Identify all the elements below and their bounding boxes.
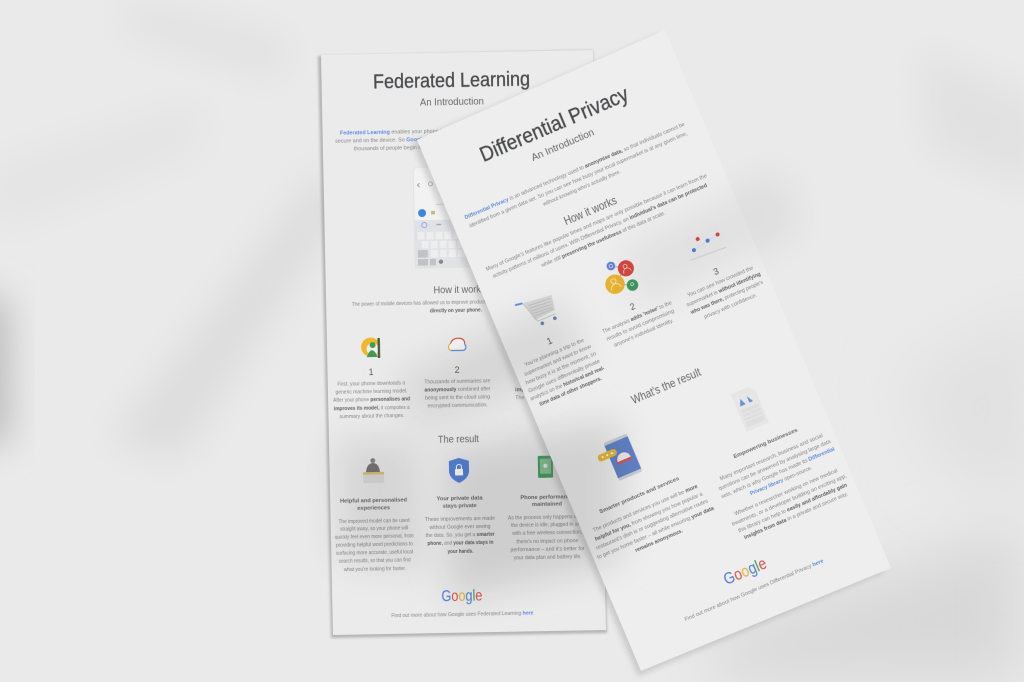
result 1: straight away, so your phone will [340, 525, 408, 533]
icon: shopping cart [516, 291, 561, 332]
step 3: supermarket is without identifying [686, 272, 762, 309]
shadow of front sheet over back sheet [412, 34, 884, 676]
step 3: 3 [712, 266, 720, 277]
heading: How it works: How it works [433, 284, 486, 296]
step 3 partial text: imp [515, 387, 525, 394]
result: smarter products: remains anonymous. [635, 528, 684, 554]
heading: The result: The result [438, 434, 479, 446]
step 2: results to avoid compromising [606, 309, 675, 343]
result: smarter products: restaurant's dish is or suggesting alternative routes [595, 498, 710, 552]
result: empowering businesses: treatments, or a developer building an exciting app, [731, 473, 848, 528]
step 1 [333, 366, 410, 420]
result 2: stays private [443, 503, 477, 510]
result 2: without Google ever seeing [429, 524, 491, 531]
result 2: phone, and your data stays in [427, 540, 493, 547]
icon: phone with food delivery [593, 433, 642, 485]
result 2 [424, 495, 496, 555]
step 1: After your phone personalises and [333, 396, 410, 404]
icon: phone with keyboard [413, 166, 493, 268]
icon: cloud [448, 338, 466, 351]
step 1 [511, 321, 609, 410]
how it works intro text [352, 299, 488, 316]
result 1: The improved model can be used [338, 518, 410, 525]
step 1: 1 [369, 367, 374, 377]
intro text: thousands of people begin to use them [354, 145, 447, 152]
heading: What's the result: What's the result [630, 367, 704, 407]
step 2: encrypted communication. [428, 402, 488, 410]
result: smarter products: Smarter products and services [599, 476, 680, 515]
icon: phone download person [361, 337, 380, 358]
step 3 partial text: The [515, 395, 525, 402]
result 1: what you're looking for faster. [343, 566, 406, 573]
result: empowering businesses: questions can be answered by analysing large data [718, 439, 832, 492]
result 1: providing helpful word predictions to [336, 541, 413, 549]
result 1 [334, 497, 415, 573]
result 3: maintained [532, 501, 563, 508]
icon: person at desk [363, 458, 384, 483]
intro text: identified from a given data set. So you can see how busy your local supermarket is at any given time, [469, 131, 689, 229]
result 3: there's no impact on phone [516, 538, 578, 545]
step 3: privacy with confidence. [703, 293, 758, 321]
step 1: improves its model, it computes a [334, 405, 410, 412]
result 3 [507, 494, 587, 561]
logo: Google: Google [441, 588, 483, 605]
step 2: Thousands of summaries are [424, 378, 490, 386]
logo: Google: Google [721, 554, 770, 589]
how it works text: activity patterns of millions of users. With Differential Privacy, an individual's data can be protected [492, 183, 708, 280]
result 1: quickly feel even more personal, from [335, 533, 414, 541]
how it works text: Many of Google's features like popular times and maps are only possible because it can learn from the [485, 173, 708, 273]
step 1: 1 [545, 336, 554, 347]
step 2: being sent to the cloud using [425, 394, 490, 401]
subheading: An Introduction: An Introduction [420, 96, 484, 109]
icon: shield with padlock [449, 458, 469, 483]
footer link text: Find out more about how Google uses Differential Privacy here [684, 559, 825, 623]
step 1: supermarket and want to know [523, 344, 592, 378]
step 2 [424, 364, 491, 410]
result 1: Helpful and personalised [340, 497, 408, 505]
icon: people noise clusters [597, 254, 642, 300]
result 2: Your private data [436, 496, 484, 502]
how it works text: while still preserving the usefulness of this data at scale. [540, 211, 667, 269]
result 3: with a free wireless connection, [511, 530, 583, 537]
intro text: secure and on the device. So Google's products [335, 137, 452, 145]
result: smarter products: The products and services you use will be more [592, 484, 699, 534]
heading: How it works: How it works [562, 195, 619, 228]
step 3: You can see how crowded the [687, 265, 754, 299]
result: empowering businesses: sets, which is why Google has made its Differential [721, 446, 836, 500]
icon: green phone [538, 456, 553, 478]
intro text [335, 129, 452, 153]
step 1: how busy it is at the moment, so [525, 351, 597, 386]
how it works intro text: directly on your phone. [430, 307, 482, 314]
step 3: who was there, protecting people's [689, 280, 764, 316]
intro text: Federated Learning enables your phone to [340, 129, 445, 137]
panel: Differential Privacy sheet (front) [417, 30, 891, 671]
step 2: anyone's individual identity. [613, 318, 675, 349]
result 2: the data. So, you get a smarter [426, 532, 496, 539]
result: empowering businesses: this library can help to easily and affordably gain [738, 483, 848, 535]
step 2: 2 [454, 365, 460, 375]
result 3: As the process only happens when [508, 514, 586, 521]
intro text: Differential Privacy is an advanced technology used to anonymise data, so that individuals cannot be [464, 122, 686, 221]
icon: scatter chart [682, 225, 726, 262]
how it works intro text: The power of mobile devices has allowed us to improve products [352, 299, 488, 308]
result 1: experiences [357, 505, 390, 512]
intro text: without knowing who's actually there. [541, 169, 622, 208]
step 3 [677, 251, 769, 325]
footer link text: Find out more about how Google uses Federated Learning here [391, 611, 533, 619]
icon: document [731, 385, 769, 432]
result: empowering businesses: Whether a researcher working on new medical [734, 468, 839, 518]
subheading: An Introduction: An Introduction [530, 126, 596, 164]
heading: Federated Learning: Federated Learning [373, 68, 530, 94]
result: empowering businesses: Many important research, business and social [719, 433, 824, 482]
result: smarter products: helpful for you, from showing you how popular a [594, 491, 704, 543]
step 1: First, your phone downloads a [337, 380, 405, 388]
result: empowering businesses [707, 416, 855, 544]
result: smarter products [581, 468, 719, 569]
step 3 partial text [515, 387, 526, 402]
result 3: performance – and it's better for [510, 546, 585, 553]
result 1: surfacing more accurate, useful local [336, 549, 413, 557]
result 2: These improvements are made [425, 516, 495, 523]
step 1: generic machine learning model. [335, 388, 408, 396]
heading: Differential Privacy: Differential Privacy [476, 83, 632, 167]
result 3: Phone performance [520, 494, 573, 501]
step 2: anonymously combined after [424, 386, 491, 393]
result 3: your data plan and battery life. [514, 554, 582, 561]
panel: Federated Learning sheet (back) [318, 50, 607, 638]
step 1: summary about the changes. [339, 413, 405, 420]
result 3: the device is idle, plugged in and [511, 522, 583, 529]
step 1: time data of other shoppers. [539, 376, 603, 408]
step 2 [596, 287, 680, 351]
step 1: analytics on the historical and real- [530, 366, 606, 403]
step 2: 2 [628, 301, 637, 312]
soft environmental shadows across sheets [335, 170, 800, 600]
result: empowering businesses: insights from data in a private and secure way. [743, 492, 849, 541]
step 1: Google uses differentially private [528, 358, 601, 394]
result: smarter products: to get you home faster – all while ensuring your data [597, 505, 716, 561]
result: empowering businesses: Empowering businesses [733, 427, 799, 460]
result 2: your hands. [448, 548, 474, 555]
step 2: The analysis adds 'noise' to the [602, 300, 673, 335]
result 1: search results, so that you can find [339, 557, 411, 565]
result: empowering businesses: Privacy library open-source. [749, 465, 814, 497]
step 1: You're planning a trip to the [524, 338, 585, 369]
